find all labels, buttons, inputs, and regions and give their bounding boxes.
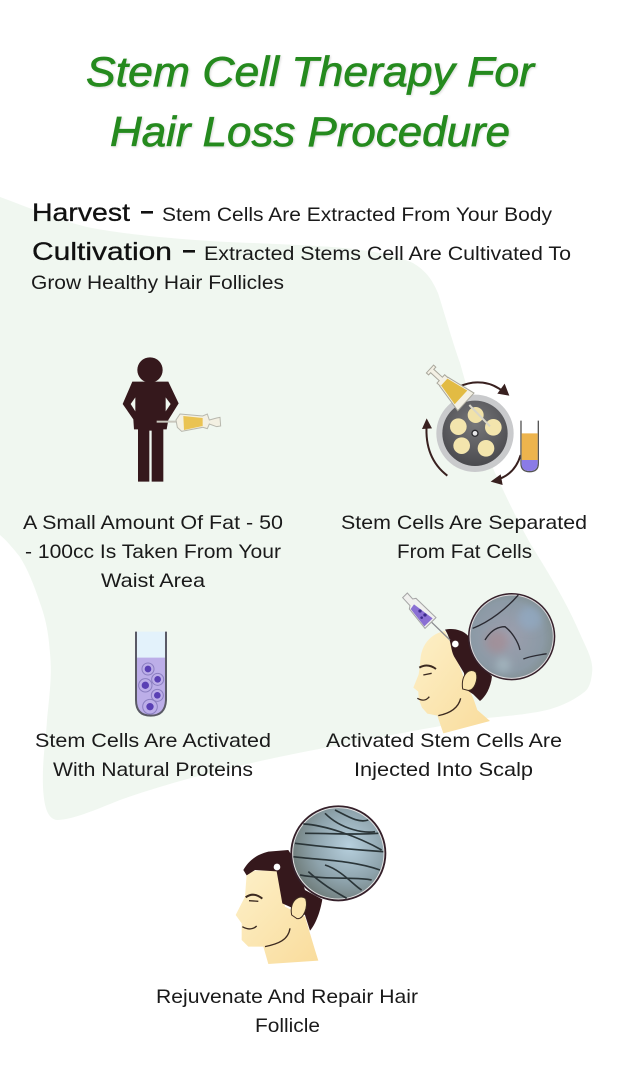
icon: test tube with activated cells	[136, 632, 166, 716]
background blob	[0, 197, 592, 820]
text block: cultivation: Grow Healthy Hair Follicles	[31, 272, 284, 294]
caption: cells activated	[35, 730, 271, 781]
caption: fat taken: Waist Area	[101, 570, 205, 592]
text block: cultivation: Extracted Stems Cell Are Cultivated To	[204, 243, 571, 265]
text block: harvest	[32, 199, 552, 227]
text block: harvest: Harvest	[32, 199, 130, 227]
caption: fat taken	[23, 512, 283, 592]
title	[86, 48, 536, 155]
text block: cultivation	[31, 238, 571, 294]
caption: cells injected: Injected Into Scalp	[354, 759, 533, 781]
caption: cells injected	[326, 730, 562, 781]
caption: rejuvenate and repair	[156, 986, 419, 1037]
caption: cells injected: Activated Stem Cells Are	[326, 730, 562, 752]
icon: head with injection and scalp close-up	[403, 593, 555, 733]
caption: cells activated: Stem Cells Are Activated	[35, 730, 271, 752]
caption: cells activated: With Natural Proteins	[53, 759, 253, 781]
text block: cultivation: Cultivation	[32, 238, 172, 266]
caption: fat taken: - 100cc Is Taken From Your	[25, 541, 282, 563]
caption: cells separated	[341, 512, 587, 563]
text block: harvest: Stem Cells Are Extracted From Your Body	[162, 204, 552, 226]
title: Stem Cell Therapy For	[86, 48, 536, 95]
title: Hair Loss Procedure	[110, 108, 510, 155]
caption: rejuvenate and repair: Follicle	[255, 1015, 320, 1037]
caption: rejuvenate and repair: Rejuvenate And Repair Hair	[156, 986, 419, 1008]
icon: person with syringe	[123, 357, 221, 482]
caption: cells separated: Stem Cells Are Separated	[341, 512, 587, 534]
caption: cells separated: From Fat Cells	[397, 541, 532, 563]
icon: centrifuge with syringe and tube	[422, 360, 538, 485]
caption: fat taken: A Small Amount Of Fat - 50	[23, 512, 283, 534]
icon: head with repaired hair close-up	[236, 805, 386, 964]
